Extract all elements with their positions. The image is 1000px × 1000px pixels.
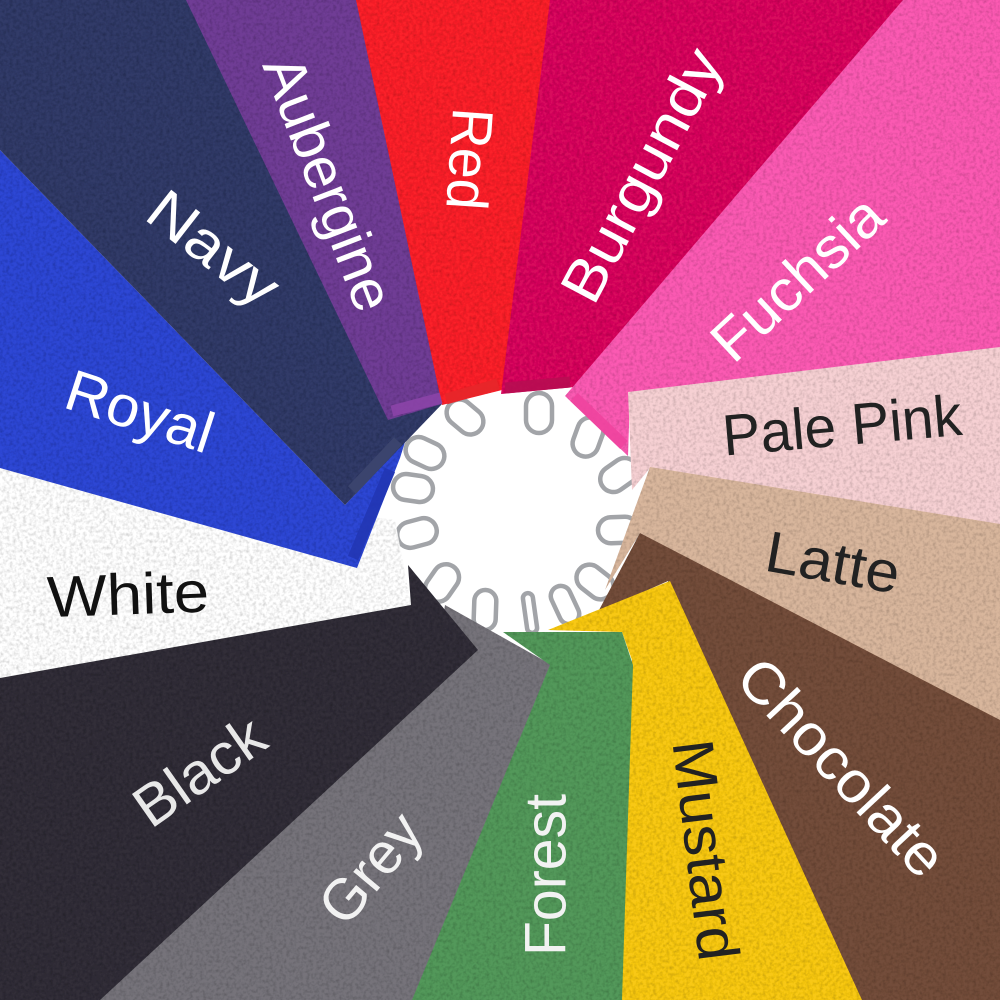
towel: fuchsia	[565, 0, 1000, 456]
label: Forest: Forest	[513, 794, 578, 956]
towel: mustard	[548, 581, 862, 1000]
towel: black	[0, 565, 478, 1000]
towel: aubergine	[186, 0, 445, 420]
towel: royal	[0, 150, 405, 568]
label: Pale Pink: Pale Pink	[720, 383, 965, 469]
metal rings	[391, 393, 643, 634]
label: Red: Red	[433, 106, 505, 212]
towel: navy	[0, 0, 443, 505]
label: Chocolate: Chocolate	[724, 645, 959, 890]
towel: grey	[98, 605, 552, 1000]
towel: pale pink	[628, 347, 1000, 527]
label: Burgundy: Burgundy	[548, 37, 736, 313]
label: Mustard: Mustard	[659, 736, 751, 964]
towel: latte	[605, 467, 1000, 722]
label: Aubergine: Aubergine	[250, 47, 407, 320]
label: Grey: Grey	[306, 800, 436, 937]
label: Fuchsia: Fuchsia	[698, 182, 898, 375]
towel: white	[0, 468, 411, 680]
label: Navy: Navy	[134, 177, 293, 320]
towel: burgundy	[501, 0, 905, 394]
towel: red	[356, 0, 554, 405]
towel hems	[352, 382, 624, 558]
towel: chocolate	[598, 533, 1000, 1000]
label: Black: Black	[121, 703, 279, 840]
towel: forest	[412, 632, 633, 1000]
label: Latte: Latte	[761, 519, 905, 607]
label: White: White	[46, 559, 210, 630]
label: Royal: Royal	[57, 357, 222, 466]
